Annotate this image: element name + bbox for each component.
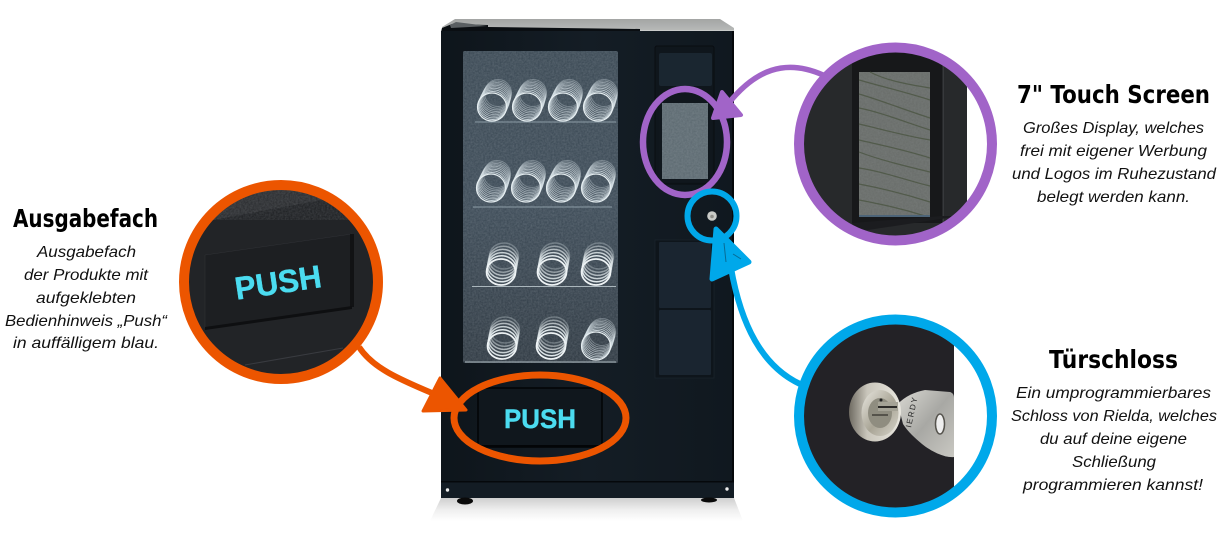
description: touch screen: belegt werden kann.: [1037, 189, 1190, 206]
description: Türschloss: [1011, 385, 1217, 494]
shelf lines: [465, 122, 616, 362]
push flap: [478, 388, 602, 448]
text block: Türschloss: [1011, 345, 1217, 494]
description: Ausgabefach: Bedienhinweis „Push“: [5, 313, 169, 330]
description: Ausgabefach: Ausgabefach: [36, 244, 136, 261]
floor reflection: [430, 498, 743, 521]
panel: lock detail circle: [794, 314, 998, 518]
arrow: purple to touch screen: [713, 67, 823, 118]
machine body: [441, 31, 734, 483]
push flap: PUSH: [504, 404, 576, 434]
description: Ausgabefach: [5, 244, 169, 352]
machine top lid: [441, 19, 734, 32]
description: Türschloss: du auf deine eigene: [1040, 431, 1187, 448]
vending machine: [441, 19, 734, 504]
highlight: lock circle: [688, 192, 736, 240]
description: Türschloss: Schloss von Rielda, welches: [1011, 408, 1217, 425]
heading: Ausgabefach: Ausgabefach: [13, 204, 158, 233]
description: Ausgabefach: aufgeklebten: [36, 290, 136, 307]
text block: touch screen: [1012, 80, 1217, 206]
text block: Ausgabefach: [5, 204, 169, 352]
description: touch screen: [1012, 120, 1217, 206]
highlight: touch screen oval: [643, 89, 727, 195]
panel: Ausgabefach detail circle: [179, 180, 383, 384]
arrow: orange to push flap: [359, 347, 466, 411]
spiral row 2: [476, 160, 616, 202]
machine base: [441, 481, 734, 504]
spiral row 1: [478, 80, 618, 121]
key: IERDY: [904, 395, 920, 428]
touch screen: [662, 103, 708, 179]
highlight: push oval: [454, 375, 626, 461]
description: Ausgabefach: der Produkte mit: [24, 267, 149, 284]
description: touch screen: Großes Display, welches: [1023, 120, 1204, 137]
description: Türschloss: programmieren kannst!: [1022, 477, 1204, 494]
right control panel: [655, 46, 717, 378]
heading: Türschloss: Türschloss: [1049, 345, 1178, 374]
lock cylinder: [849, 382, 901, 442]
product window: [463, 51, 618, 363]
description: touch screen: und Logos im Ruhezustand: [1012, 166, 1217, 183]
spiral row 4: [488, 317, 616, 360]
lock: [707, 211, 717, 221]
description: Türschloss: Schließung: [1072, 454, 1156, 471]
description: Türschloss: Ein umprogrammierbares: [1016, 385, 1211, 402]
lower panels: [655, 240, 714, 378]
description: Ausgabefach: in auffälligem blau.: [13, 335, 159, 352]
key: [898, 390, 954, 457]
spiral row 3: [486, 243, 614, 285]
PUSH label in circle: PUSH: [232, 258, 324, 307]
arrow: blue to lock: [712, 229, 800, 384]
description: touch screen: frei mit eigener Werbung: [1020, 143, 1207, 160]
screen reflection streaks: [859, 72, 930, 216]
panel: touch screen detail circle: [794, 42, 997, 246]
